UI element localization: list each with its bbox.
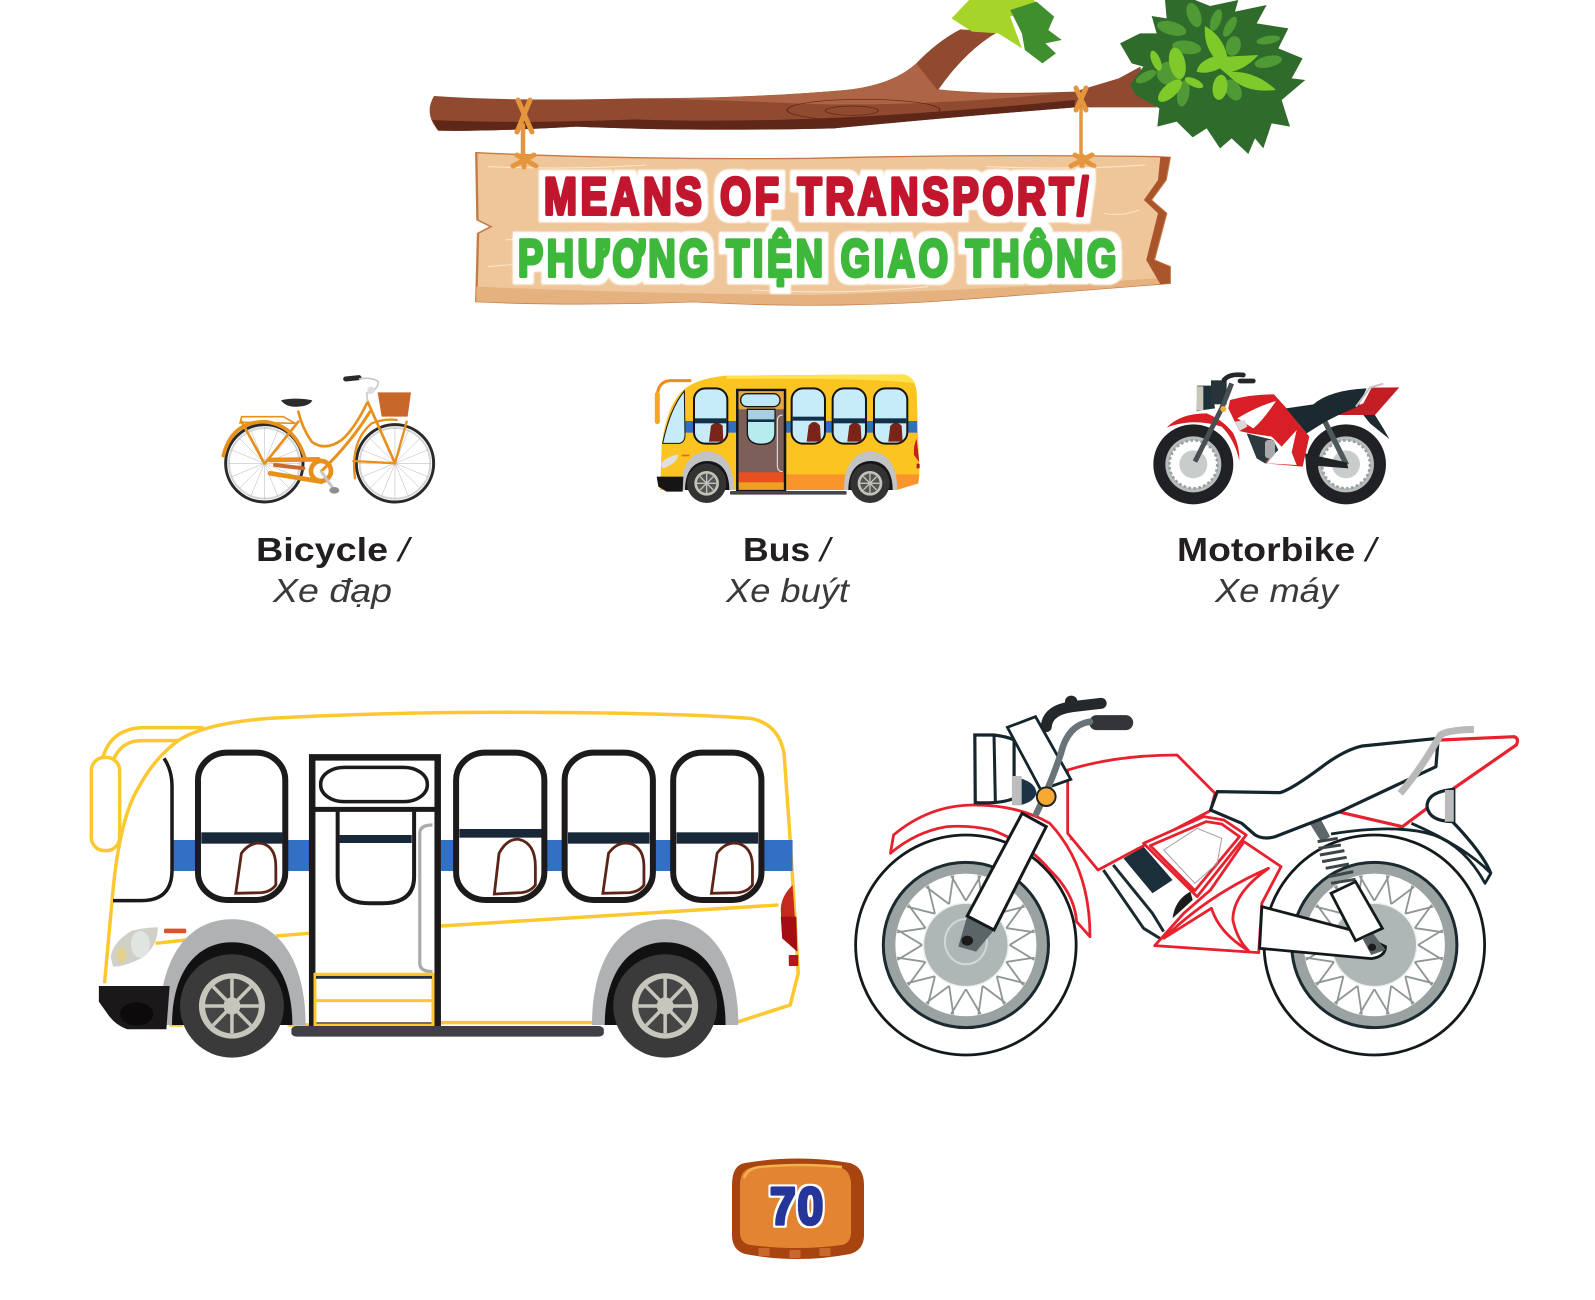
page number badge (732, 1158, 864, 1259)
small bus wheels (657, 452, 897, 503)
icon: small bus (657, 374, 920, 503)
foliage large (1120, 0, 1305, 154)
label: motorbike: Xe máy (1214, 572, 1341, 609)
motorbike fork, headlight, handlebar (1195, 375, 1253, 462)
motorbike engine (1247, 433, 1278, 463)
motorbike rear suspension (1305, 418, 1348, 468)
label: bus (725, 531, 851, 609)
motorbike body (1228, 384, 1399, 467)
bus body outline (91, 712, 798, 1025)
label: bicycle: Xe đạp (272, 572, 392, 609)
bumper (99, 986, 170, 1029)
foliage small (951, 0, 1062, 63)
title line 1: MEANS OF TRANSPORT/ (544, 168, 1092, 226)
label: bus: Bus / (743, 531, 833, 568)
small bus door (737, 390, 785, 491)
icon: small motorbike (1153, 375, 1399, 504)
headlight (975, 735, 1036, 805)
front wheel (159, 919, 306, 1058)
swing arm (1260, 907, 1386, 959)
handlebar (1007, 696, 1126, 813)
bicycle frame (223, 402, 407, 482)
icon: bicycle (223, 378, 434, 502)
label: bicycle: Bicycle / (256, 531, 412, 568)
rear shock (1310, 820, 1386, 955)
front fork (958, 813, 1046, 952)
rear lights (781, 885, 798, 966)
front window (113, 758, 172, 901)
door (312, 757, 438, 1026)
engine (1070, 820, 1193, 941)
tree branch (430, 29, 1157, 131)
title sign hanging from branch (430, 0, 1305, 305)
motorbike front fender (1167, 413, 1239, 461)
bicycle wheels (226, 425, 434, 502)
title line 2: PHƯƠNG TIỆN GIAO THÔNG (518, 229, 1120, 288)
motorbike wheels (1153, 424, 1386, 504)
indicator (1037, 787, 1056, 806)
label: bus: Xe buýt (725, 572, 851, 609)
small bus lights (661, 439, 920, 468)
label: motorbike (1177, 531, 1379, 609)
coloring outline: motorbike (856, 696, 1517, 1055)
front fender (890, 805, 1090, 937)
rear wheel (592, 919, 738, 1058)
front wheel (856, 835, 1076, 1055)
small bus windows (663, 388, 907, 444)
tail and seat (1211, 729, 1517, 883)
side windows (198, 753, 761, 900)
hanging ropes (513, 88, 1094, 167)
wooden sign board (476, 153, 1170, 305)
coloring outline: bus (91, 712, 798, 1058)
running board (291, 1026, 604, 1037)
small bus body (660, 374, 919, 490)
rear wheel (1264, 835, 1485, 1055)
small bus mirror (657, 381, 690, 422)
tank and fairing (1068, 755, 1281, 953)
label: bicycle (256, 531, 412, 609)
bicycle seat, basket and handlebar (281, 378, 411, 494)
label: motorbike: Motorbike / (1177, 531, 1379, 568)
headlight and marker (111, 927, 186, 967)
page number: 70 (770, 1178, 825, 1236)
blue stripe (173, 840, 793, 871)
